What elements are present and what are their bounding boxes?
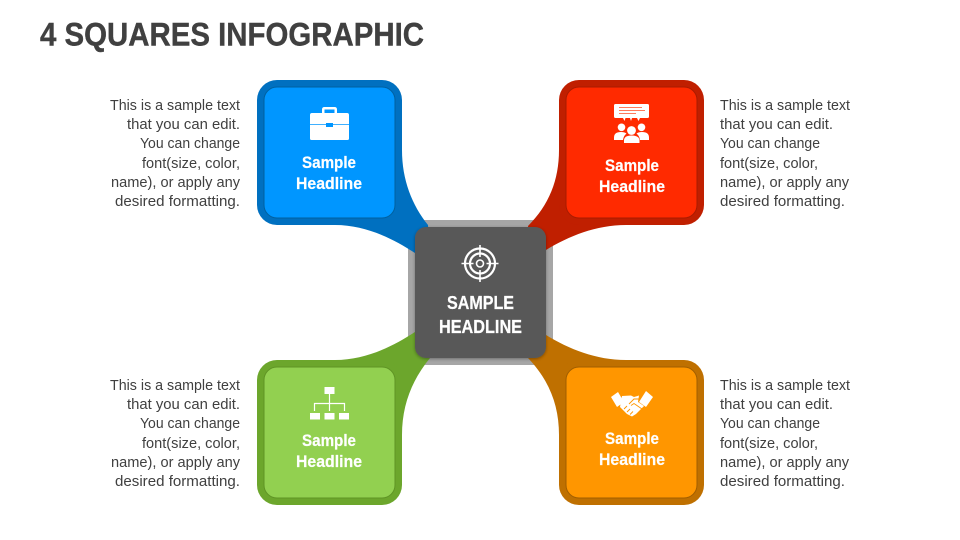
text block: top left: [110, 98, 241, 210]
orange connector: [528, 327, 626, 435]
text block: bottom right: desired formatting.: [720, 474, 845, 490]
text block: top left: desired formatting.: [115, 194, 240, 210]
orange headline: Sample: [605, 429, 659, 448]
blue inner square: [264, 87, 395, 218]
text block: bottom right: font(size, color,: [720, 436, 818, 452]
red outer frame: [559, 80, 704, 225]
text block: bottom left: name), or apply any: [111, 455, 241, 471]
text block: top right: desired formatting.: [720, 194, 845, 210]
panel: blue square: [257, 80, 430, 258]
text block: top left: name), or apply any: [111, 175, 241, 191]
blue headline: Headline: [296, 174, 362, 193]
center headline: HEADLINE: [439, 316, 522, 337]
text block: top left: font(size, color,: [142, 156, 240, 172]
panel: red square: [528, 80, 704, 258]
orange inner square: [566, 367, 697, 498]
text block: top right: font(size, color,: [720, 156, 818, 172]
icon: briefcase: [310, 107, 349, 140]
text block: bottom right: This is a sample text: [720, 378, 850, 394]
panel: green square: [257, 327, 430, 505]
center backing square: [408, 220, 553, 365]
orange headline: [599, 429, 665, 469]
icon: organization chart: [310, 387, 349, 420]
blue headline: [296, 153, 362, 193]
text block: bottom right: name), or apply any: [720, 455, 850, 471]
icon: target: [462, 245, 498, 282]
text block: top right: [720, 98, 850, 210]
text block: bottom left: This is a sample text: [110, 378, 240, 394]
green inner square: [264, 367, 395, 498]
blue outer frame: [257, 80, 402, 225]
text block: top right: that you can edit.: [720, 117, 833, 133]
orange headline: Headline: [599, 450, 665, 469]
text block: top right: You can change: [720, 136, 820, 152]
text block: top right: name), or apply any: [720, 175, 850, 191]
icon: audience with speech bubble: [614, 104, 649, 143]
text block: bottom left: desired formatting.: [115, 474, 240, 490]
panel: orange square: [528, 327, 704, 505]
text block: top right: This is a sample text: [720, 98, 850, 114]
text block: bottom left: font(size, color,: [142, 436, 240, 452]
red headline: Sample: [605, 156, 659, 175]
red inner square: [566, 87, 697, 218]
blue headline: Sample: [302, 153, 356, 172]
text block: bottom right: [720, 378, 850, 490]
red connector: [528, 150, 626, 258]
text block: bottom right: that you can edit.: [720, 397, 833, 413]
text block: bottom left: that you can edit.: [127, 397, 240, 413]
text block: bottom left: [110, 378, 241, 490]
text block: top left: that you can edit.: [127, 117, 240, 133]
text block: bottom left: You can change: [140, 416, 240, 432]
center headline: [439, 292, 522, 337]
green connector: [335, 327, 430, 435]
red headline: Headline: [599, 177, 665, 196]
text block: top left: This is a sample text: [110, 98, 240, 114]
title: 4 SQUARES INFOGRAPHIC: [40, 16, 424, 52]
text block: top left: You can change: [140, 136, 240, 152]
icon: handshake: [611, 391, 653, 416]
red headline: [599, 156, 665, 196]
green headline: Sample: [302, 431, 356, 450]
center headline: SAMPLE: [447, 292, 514, 313]
blue connector: [335, 150, 430, 258]
panel: center square: [415, 227, 546, 358]
center dark square: [415, 227, 546, 358]
orange outer frame: [559, 360, 704, 505]
text block: bottom right: You can change: [720, 416, 820, 432]
green headline: [296, 431, 362, 471]
green outer frame: [257, 360, 402, 505]
green headline: Headline: [296, 452, 362, 471]
